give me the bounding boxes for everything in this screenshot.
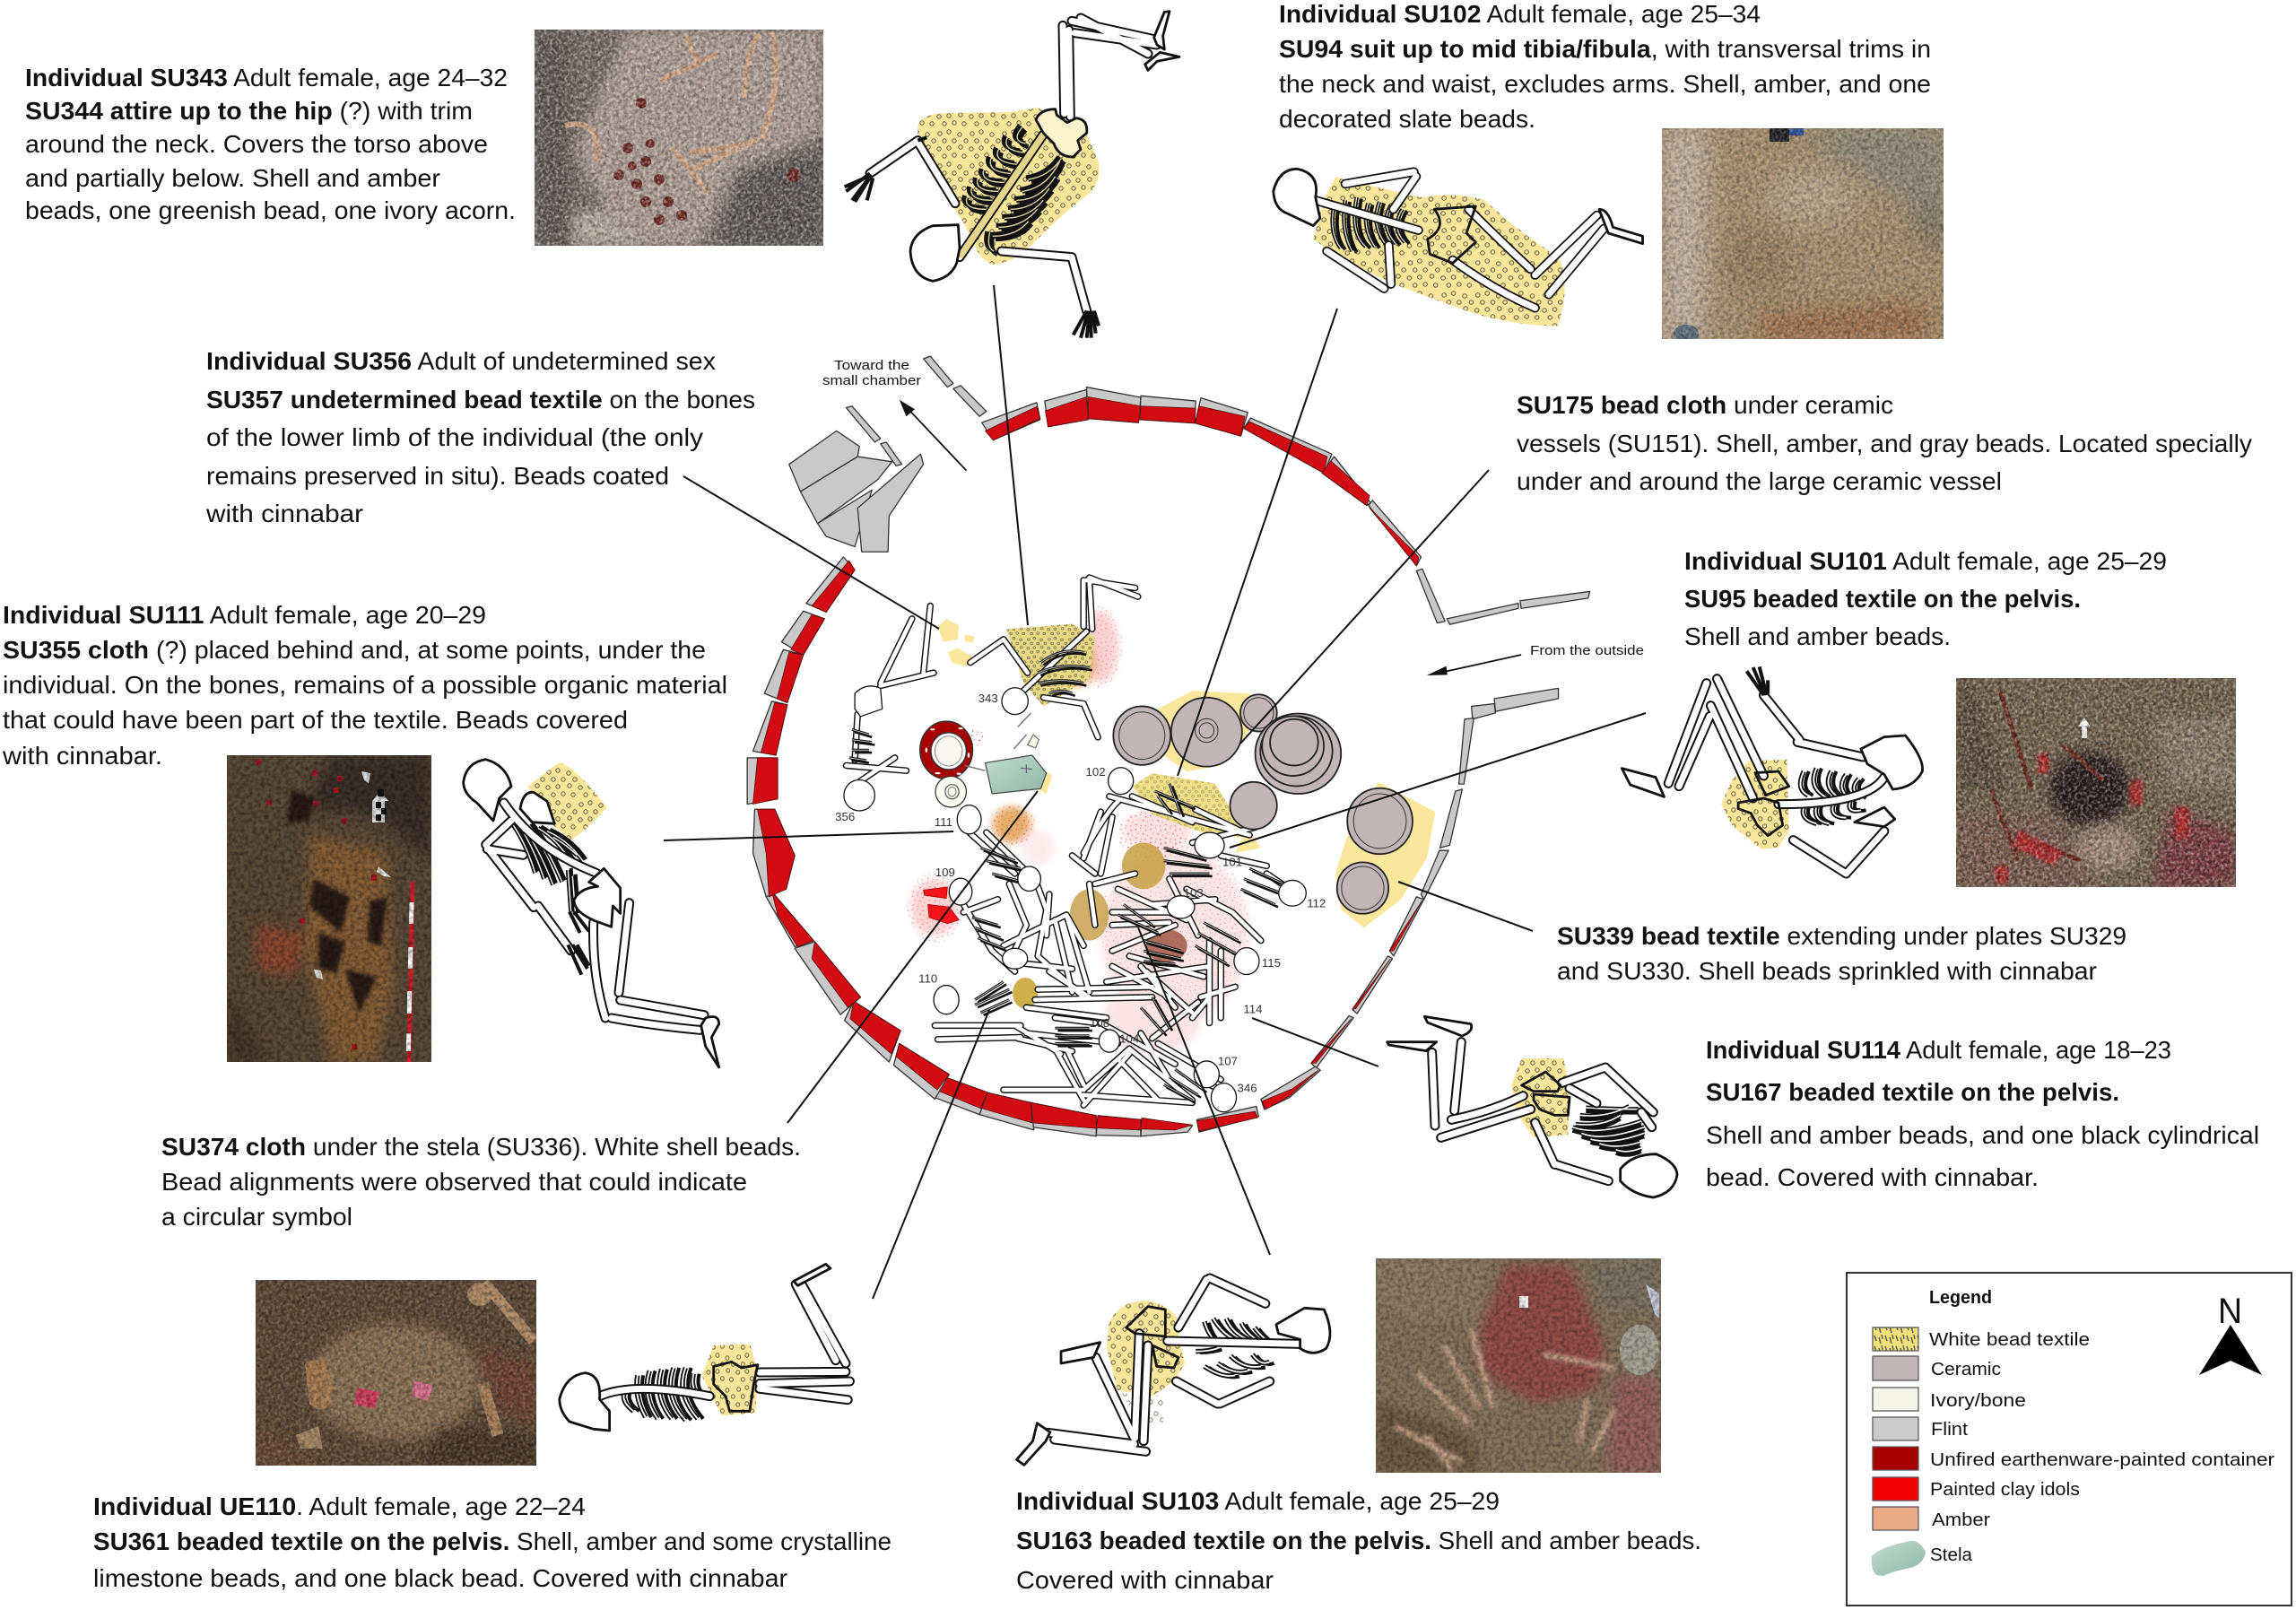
text: SU374 cloth: SU374 cloth under the stela (SU336). White shell beads. <box>161 1133 801 1161</box>
north arrow <box>2199 1292 2262 1375</box>
text: individual SU114 <box>1706 1036 2259 1191</box>
text: SU374 cloth: a circular symbol <box>161 1203 352 1231</box>
text: individual SU356: remains preserved in situ). Beads coated <box>206 462 669 490</box>
individual number labels: 346 <box>1238 1081 1257 1094</box>
photo: SU101 excavation <box>1956 678 2236 887</box>
text: individual SU103: Covered with cinnabar <box>1016 1566 1274 1594</box>
text: individual UE110: SU361 beaded textile on the pelvis. Shell, amber and some crystalline <box>93 1527 891 1555</box>
arrow: toward small chamber <box>900 400 966 471</box>
text: individual UE110: limestone beads, and one black bead. Covered with cinnabar <box>93 1564 787 1592</box>
skeleton group in plan <box>844 578 1306 1112</box>
north arrow: N <box>2218 1292 2242 1331</box>
label: toward the small chamber <box>822 358 921 388</box>
text: individual SU356 <box>205 347 755 527</box>
individual number labels: 101 <box>1222 855 1242 868</box>
text: individual SU114: Shell and amber beads, and one black cylindrical <box>1706 1121 2259 1149</box>
legend title: Legend <box>1929 1288 1992 1308</box>
text: individual SU102: the neck and waist, excludes arms. Shell, amber, and one <box>1279 70 1931 98</box>
unfired earthenware container <box>920 721 972 779</box>
photo: SU102 excavation <box>1662 128 1944 343</box>
text: individual SU111: Individual SU111 Adult female, age 20–29 <box>3 601 486 629</box>
individual number labels: 115 <box>1262 956 1281 970</box>
central burial chamber plan <box>747 356 1590 1136</box>
skeleton: SU114 <box>1387 1016 1677 1197</box>
text: individual SU356: with cinnabar <box>205 500 363 527</box>
legend: unfired container <box>1873 1447 2274 1470</box>
photo: SU103 excavation <box>1376 1258 1661 1473</box>
clay idols <box>924 887 959 924</box>
text: SU175 bead cloth: vessels (SU151). Shell, amber, and gray beads. Located specially <box>1517 430 2252 457</box>
text: individual SU102 <box>1279 0 1931 133</box>
individual number labels: 109 <box>935 866 955 879</box>
legend: unfired container: Unfired earthenware-painted container <box>1930 1450 2274 1470</box>
text: individual SU343: beads, one greenish bead, one ivory acorn. <box>25 196 516 224</box>
individual number labels: 114 <box>1243 1003 1263 1016</box>
photo: SU343 excavation <box>535 30 823 246</box>
text: SU339 bead textile: SU339 bead textile extending under plates SU329 <box>1557 922 2126 950</box>
text: SU374 cloth <box>161 1133 801 1231</box>
text: individual SU101: SU95 beaded textile on the pelvis. <box>1684 585 2081 613</box>
individual number labels: 107 <box>1218 1055 1238 1068</box>
legend panel <box>1847 1273 2292 1606</box>
text: individual SU102: Individual SU102 Adult female, age 25–34 <box>1279 0 1761 28</box>
text: individual UE110: Individual UE110. Adult female, age 22–24 <box>93 1493 586 1520</box>
yellow bead areas <box>938 619 1435 927</box>
text: individual SU103 <box>1016 1487 1701 1594</box>
legend: painted clay idols <box>1873 1477 2080 1501</box>
flint slab cluster <box>789 406 924 552</box>
skeleton: SU103 <box>1017 1278 1330 1465</box>
label: toward the small chamber: Toward the <box>834 358 909 373</box>
skeleton: SU110 <box>560 1264 849 1431</box>
text: individual SU356: Individual SU356 Adult of undetermined sex <box>206 347 716 375</box>
text: individual SU111: SU355 cloth (?) placed behind and, at some points, under the <box>3 636 706 664</box>
label: toward the small chamber: small chamber <box>822 373 921 388</box>
skeleton: SU343 <box>845 12 1179 338</box>
text: individual SU111: individual. On the bones, remains of a possible organic material <box>3 671 727 699</box>
small objects: flint blades and acorn <box>1013 713 1039 749</box>
individual number labels: 103 <box>1184 886 1204 900</box>
skeleton: SU101 <box>1622 666 1923 874</box>
legend: flint: Flint <box>1931 1420 1968 1440</box>
text: individual UE110 <box>93 1493 891 1592</box>
text: individual SU101: Individual SU101 Adult female, age 25–29 <box>1684 547 2167 575</box>
text: individual SU343: SU344 attire up to the hip (?) with trim <box>25 97 473 125</box>
text: individual SU102: decorated slate beads. <box>1279 105 1535 133</box>
skeleton: SU102 <box>1274 169 1643 326</box>
text: individual SU356: SU357 undetermined bead textile on the bones <box>206 386 755 413</box>
arrow: from the outside <box>1427 655 1521 675</box>
legend: painted clay idols: Painted clay idols <box>1930 1480 2080 1500</box>
legend: flint <box>1873 1417 1968 1440</box>
stela <box>965 755 1047 794</box>
text: SU175 bead cloth: under and around the large ceramic vessel <box>1517 467 2002 495</box>
text: individual SU111: with cinnabar. <box>2 742 162 770</box>
legend: ivory/bone: Ivory/bone <box>1930 1391 2026 1411</box>
legend: ceramic <box>1873 1356 2001 1380</box>
ivory disc <box>935 777 966 807</box>
legend: white bead textile: White bead textile <box>1929 1330 2090 1350</box>
text: individual SU101 <box>1684 547 2167 650</box>
text: individual SU343: and partially below. Shell and amber <box>25 164 440 192</box>
legend: amber <box>1873 1507 1990 1530</box>
legend: white bead textile <box>1873 1327 2090 1351</box>
text: SU374 cloth: Bead alignments were observed that could indicate <box>161 1168 747 1196</box>
individual number labels: 112 <box>1307 896 1326 909</box>
text: individual SU114: SU167 beaded textile on the pelvis. <box>1706 1078 2119 1106</box>
text: individual SU111 <box>2 601 727 770</box>
text: individual SU102: SU94 suit up to mid tibia/fibula, with transversal trims in <box>1279 35 1931 63</box>
individual number labels: 356 <box>835 810 855 823</box>
text: individual SU101: Shell and amber beads. <box>1684 622 1951 650</box>
leader lines <box>664 285 1646 1299</box>
legend: amber: Amber <box>1932 1510 1990 1530</box>
individual number labels <box>835 692 1326 1094</box>
text: individual SU343: around the neck. Covers the torso above <box>25 130 488 158</box>
text: individual SU343: Individual SU343 Adult female, age 24–32 <box>25 64 508 91</box>
individual number labels: 110 <box>918 972 937 986</box>
photo: SU111 excavation <box>227 755 431 1062</box>
individual number labels: 343 <box>978 692 998 705</box>
text: SU339 bead textile: and SU330. Shell beads sprinkled with cinnabar <box>1557 957 2097 985</box>
legend: stela: Stela <box>1930 1545 1973 1565</box>
legend: ivory/bone <box>1873 1388 2026 1411</box>
text: individual SU114: bead. Covered with cinnabar. <box>1706 1163 2039 1191</box>
text: individual SU103: Individual SU103 Adult female, age 25–29 <box>1016 1487 1500 1515</box>
text: SU175 bead cloth <box>1517 391 2252 495</box>
legend: ceramic: Ceramic <box>1931 1360 2001 1379</box>
text: individual SU114: Individual SU114 Adult female, age 18–23 <box>1706 1036 2171 1064</box>
text: individual SU103: SU163 beaded textile on the pelvis. Shell and amber beads. <box>1016 1527 1701 1554</box>
text: individual SU111: that could have been part of the textile. Beads covered <box>3 706 628 734</box>
text: individual SU356: of the lower limb of the individual (the only <box>206 423 703 451</box>
label: from the outside: From the outside <box>1530 643 1644 658</box>
legend: stela <box>1872 1541 1973 1576</box>
photo: SU110 excavation <box>256 1280 536 1466</box>
text: individual SU343 <box>25 64 516 224</box>
text: SU175 bead cloth: SU175 bead cloth under ceramic <box>1517 391 1893 419</box>
individual number labels: 108 <box>1090 1016 1109 1030</box>
ceramic vessels <box>1113 694 1413 914</box>
individual number labels: 104 <box>1119 1031 1139 1045</box>
skeleton: SU111 <box>464 760 719 1067</box>
individual number labels: 111 <box>935 815 952 829</box>
text: SU339 bead textile <box>1557 922 2126 985</box>
individual number labels: 102 <box>1086 765 1106 779</box>
chamber wall ring <box>747 356 1590 1136</box>
cinnabar staining <box>908 606 1249 1054</box>
